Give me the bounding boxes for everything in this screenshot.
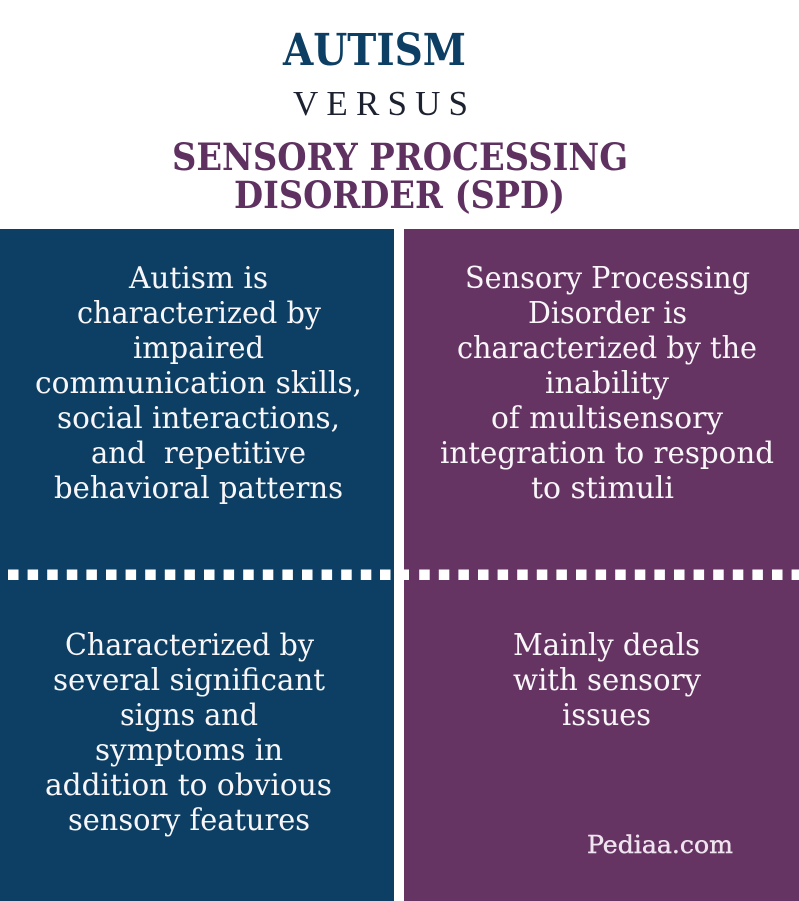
text block: autism definition: behavioral patterns <box>54 471 343 506</box>
text block: autism signs: addition to obvious <box>45 768 332 803</box>
text block: SPD definition: of multisensory <box>491 401 723 436</box>
text block: autism definition: and repetitive <box>91 436 306 471</box>
text block: SPD definition: inability <box>545 366 669 401</box>
text block: SPD sensory issues <box>513 628 701 733</box>
dotted divider <box>8 570 799 580</box>
text block: SPD sensory issues: with sensory <box>513 663 701 698</box>
heading: versus: VERSUS <box>293 84 468 123</box>
text block: autism definition: impaired <box>133 331 264 366</box>
text block: SPD definition: Disorder is <box>528 296 687 331</box>
logo: Pediaa.com: Pediaa.com <box>587 831 733 859</box>
panel: autism column <box>0 229 394 901</box>
title: Sensory Processing Disorder <box>172 135 628 217</box>
text block: autism signs: Characterized by <box>65 628 314 663</box>
text block: autism definition <box>35 261 362 506</box>
text block: SPD sensory issues: Mainly deals <box>513 628 700 663</box>
text block: SPD definition <box>440 261 774 506</box>
panel: SPD column <box>404 229 799 901</box>
title: Sensory Processing Disorder: DISORDER (SPD) <box>234 173 565 217</box>
text block: autism signs: symptoms in <box>95 733 283 768</box>
text block: SPD definition: characterized by the <box>457 331 757 366</box>
text block: autism definition: communication skills, <box>35 366 362 401</box>
text block: SPD definition: integration to respond <box>440 436 774 471</box>
title: Sensory Processing Disorder: SENSORY PROCESSING <box>172 135 628 179</box>
text block: SPD definition: Sensory Processing <box>465 261 750 296</box>
text block: autism definition: social interactions, <box>57 401 340 436</box>
text block: autism signs: sensory features <box>68 803 310 838</box>
text block: autism signs <box>45 628 332 838</box>
text block: autism definition: characterized by <box>77 296 321 331</box>
text block: autism signs: several significant <box>53 663 325 698</box>
text block: autism definition: Autism is <box>128 261 268 296</box>
title: Autism: AUTISM <box>282 25 466 76</box>
text block: autism signs: signs and <box>120 698 258 733</box>
text block: SPD sensory issues: issues <box>562 698 651 733</box>
text block: SPD definition: to stimuli <box>531 471 674 506</box>
